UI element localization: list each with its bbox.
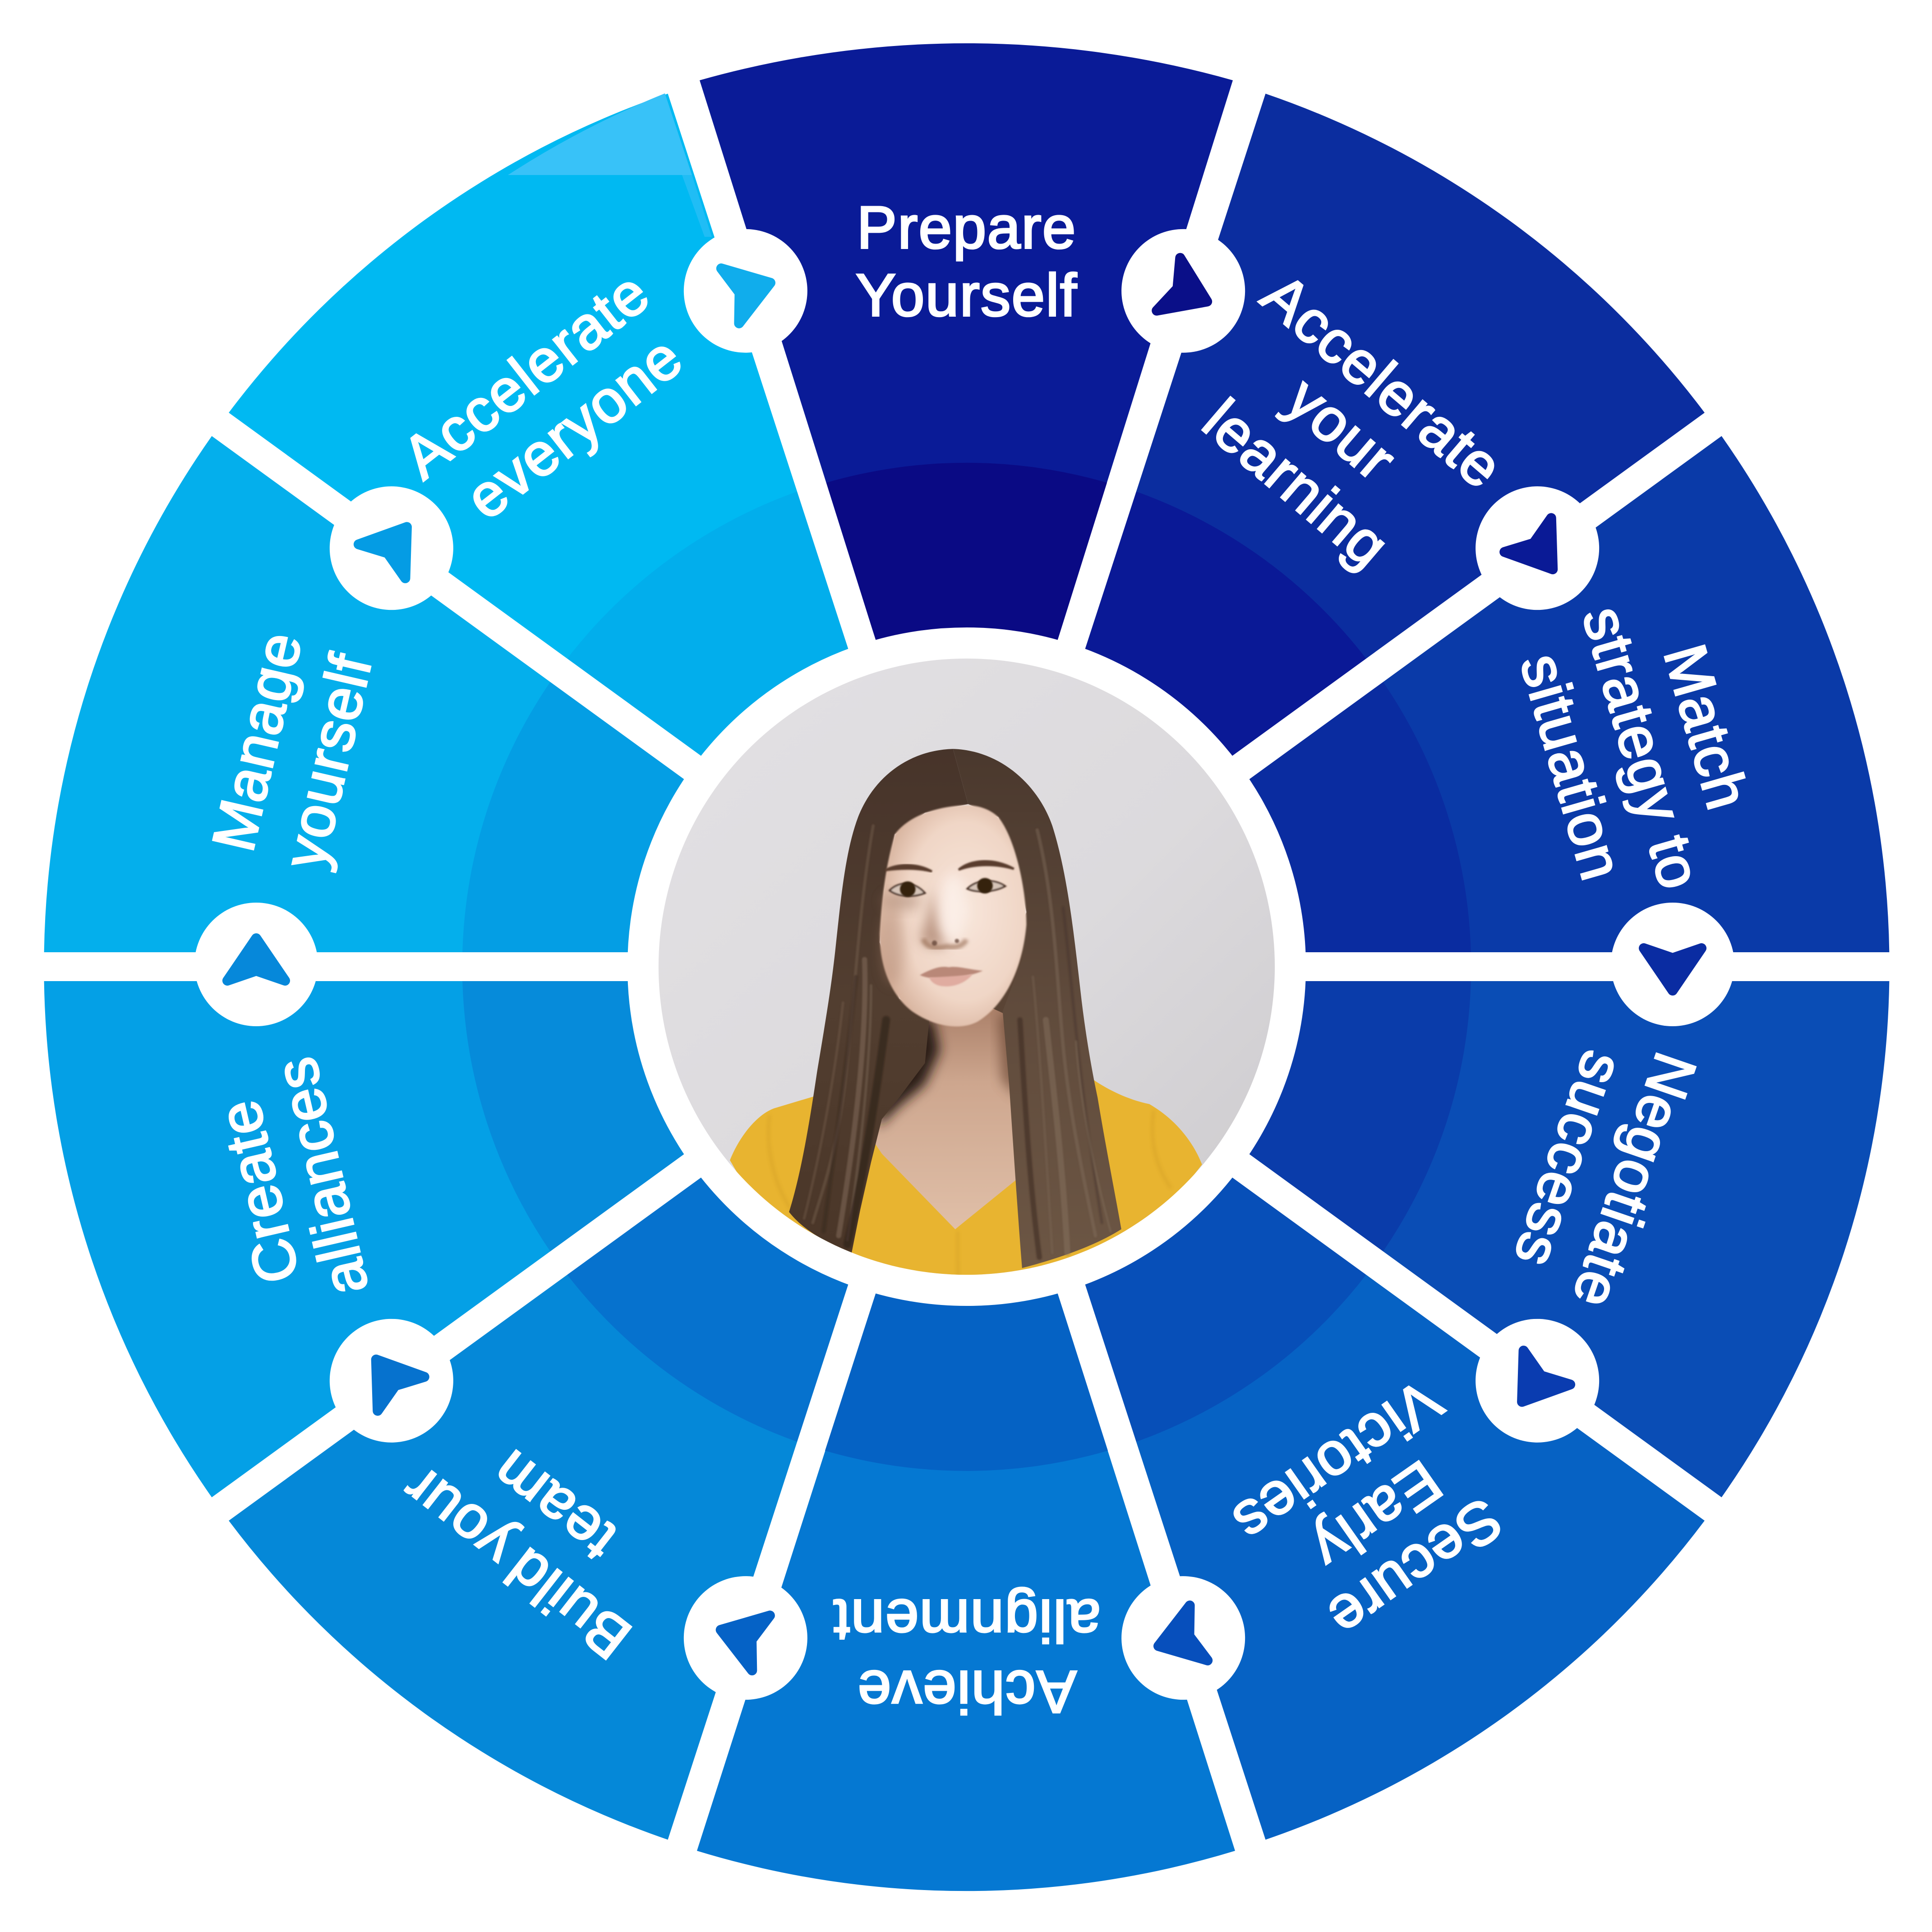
- icon: arrow node 6: [668, 1560, 823, 1716]
- label: Prepare Yourself: Yourself: [856, 262, 1078, 329]
- label: Create alliances: Create: [205, 1094, 312, 1289]
- label: Build your team: [384, 1399, 687, 1674]
- label: Accelerate everyone: [384, 258, 709, 550]
- panel: Accelerate everyone: [205, 60, 995, 863]
- label: Accelerate your learning: [1159, 258, 1529, 610]
- panel: Build your team: [205, 1070, 995, 1873]
- label: Accelerate everyone: Accelerate: [390, 259, 662, 492]
- label: Negotiate success: [1494, 1022, 1709, 1318]
- label: Prepare Yourself: [856, 194, 1078, 329]
- eyes: [890, 884, 925, 896]
- label: Achieve alignment: [833, 1587, 1101, 1725]
- label: Accelerate your learning: learning: [1190, 387, 1402, 581]
- label: Manage yourself: Manage: [200, 626, 315, 857]
- label: Secure Early Victories: Secure: [1316, 1485, 1514, 1651]
- panel: Accelerate your learning: [938, 60, 1729, 863]
- panel: Secure Early Victories: [938, 1070, 1729, 1873]
- label: Manage yourself: [181, 619, 403, 885]
- panel: Create alliances: [5, 809, 741, 1510]
- label: Achieve alignment: alignment: [833, 1587, 1101, 1654]
- panel: Match strategy to situation: [1193, 423, 1928, 1124]
- label: Build your team: team: [480, 1437, 628, 1574]
- label: Match strategy to situation: [1492, 577, 1786, 921]
- panel: Manage yourself: [5, 423, 741, 1124]
- icon: arrow node 4: [1451, 1294, 1624, 1467]
- label: Negotiate success: Negotiate: [1559, 1045, 1709, 1317]
- highlight patch on Accelerate everyone: [508, 93, 712, 237]
- panel: Negotiate success: [1193, 809, 1928, 1510]
- panel: Achieve alignment: [697, 1292, 1235, 1891]
- label: Match strategy to situation: strategy to: [1570, 599, 1714, 897]
- label: Match strategy to situation: situation: [1508, 646, 1636, 888]
- label: Negotiate success: success: [1501, 1043, 1637, 1276]
- icon: arrow node 8: [194, 903, 318, 1026]
- label: Accelerate everyone: everyone: [454, 323, 695, 532]
- panel: Prepare Yourself: [700, 43, 1233, 641]
- icon: arrow node 7: [305, 1294, 478, 1467]
- label: Achieve alignment: Achieve: [857, 1658, 1077, 1725]
- label: Build your team: Build your: [390, 1454, 643, 1672]
- icon: arrow node 1: [1106, 213, 1261, 369]
- label: Accelerate your learning: your: [1274, 365, 1409, 494]
- label: Create alliances: alliances: [262, 1051, 381, 1301]
- icon: arrow node 10: [668, 213, 823, 369]
- brows: [885, 865, 932, 871]
- center portrait of a woman: [649, 649, 1287, 1287]
- icon: arrow node 2: [1451, 462, 1624, 635]
- icon: arrow node 3: [1611, 903, 1734, 1026]
- label: Manage yourself: yourself: [271, 648, 385, 874]
- label: Secure Early Victories: [1220, 1363, 1532, 1667]
- icon: arrow node 5: [1106, 1560, 1261, 1716]
- icon: arrow node 9: [305, 462, 478, 635]
- label: Create alliances: [183, 1045, 401, 1326]
- label: Secure Early Victories: Early: [1300, 1448, 1453, 1583]
- label: Prepare Yourself: Prepare: [857, 194, 1077, 261]
- label: Accelerate your learning: Accelerate: [1250, 261, 1515, 502]
- label: Match strategy to situation: Match: [1651, 637, 1761, 817]
- lips: [920, 967, 983, 978]
- label: Secure Early Victories: Victories: [1221, 1366, 1453, 1557]
